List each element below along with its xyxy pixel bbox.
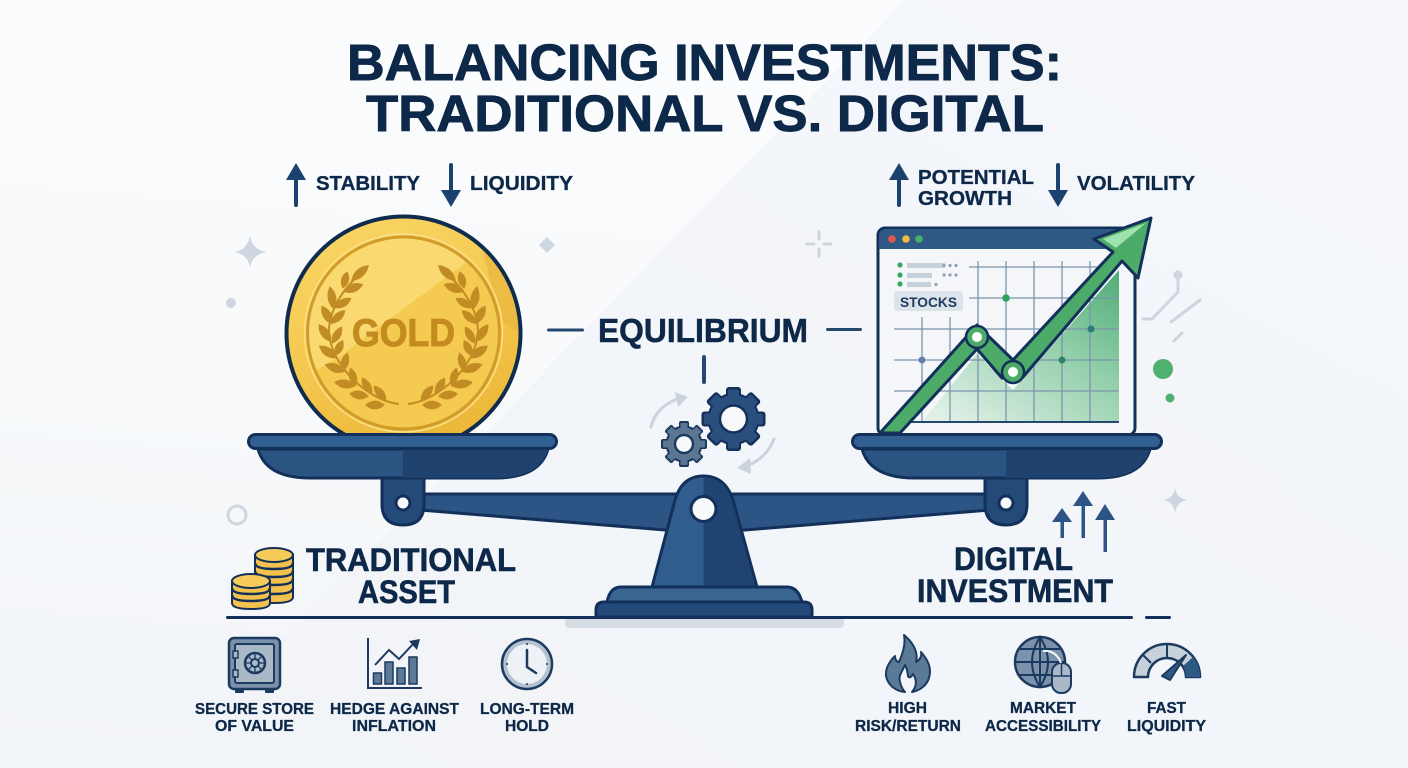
icon: small gear	[661, 421, 707, 467]
label: LONG-TERM	[480, 701, 574, 718]
label: potential growth: GROWTH	[918, 188, 1012, 210]
green dots	[1153, 359, 1174, 402]
label: RISK/RETURN	[855, 718, 961, 735]
equilibrium label: EQUILIBRIUM	[598, 312, 808, 349]
label: HIGH	[888, 700, 927, 717]
label	[985, 700, 1101, 735]
back stack	[255, 548, 293, 603]
gold coin	[286, 216, 530, 450]
icon: bar chart with arrow	[368, 638, 422, 688]
icon: globe and mouse	[1015, 637, 1071, 693]
label: HEDGE AGAINST	[330, 701, 459, 718]
label: HOLD	[505, 718, 549, 735]
rim shading	[482, 250, 518, 332]
label: ACCESSIBILITY	[985, 718, 1101, 735]
digital indicators	[889, 163, 1196, 210]
area fill	[922, 270, 1119, 422]
laurel wreath	[315, 262, 492, 409]
coin face	[309, 238, 498, 428]
label	[1127, 700, 1206, 735]
item: fast liquidity	[1127, 644, 1206, 735]
label: SECURE STORE	[195, 701, 314, 718]
label: OF VALUE	[215, 718, 294, 735]
front stack	[232, 574, 270, 609]
label	[855, 700, 961, 735]
title	[347, 34, 1062, 142]
label: potential growth	[918, 167, 1034, 210]
right pan	[852, 434, 1162, 478]
item: long-term hold	[480, 639, 574, 735]
gears	[651, 387, 774, 474]
label: FAST	[1147, 700, 1186, 717]
gold label: GOLD	[352, 312, 455, 355]
title: TRADITIONAL VS. DIGITAL	[366, 85, 1044, 142]
heading: digital investment	[917, 541, 1113, 609]
label: volatility: VOLATILITY	[1077, 173, 1196, 195]
legend list	[897, 262, 958, 287]
chart grid	[894, 261, 1119, 422]
green growth arrow	[880, 218, 1151, 433]
traditional indicators	[286, 163, 574, 207]
fulcrum	[652, 476, 757, 587]
heading: digital investment: INVESTMENT	[917, 573, 1113, 609]
icon: liquidity down arrow	[441, 163, 461, 207]
title: BALANCING INVESTMENTS:	[347, 34, 1062, 91]
label: LIQUIDITY	[1127, 718, 1206, 735]
label	[330, 701, 459, 735]
icon: volatility down arrow	[1048, 163, 1068, 207]
icon: stability up arrow	[286, 163, 306, 207]
label: liquidity: LIQUIDITY	[470, 173, 574, 195]
label: potential growth: POTENTIAL	[918, 167, 1034, 189]
left pan	[248, 434, 556, 478]
stocks tag: STOCKS	[900, 294, 957, 310]
item: hedge against inflation	[330, 638, 459, 735]
icon: rotation arrows	[651, 392, 774, 474]
stock chart window	[878, 228, 1135, 435]
label: stability: STABILITY	[316, 173, 421, 195]
stocks tag	[894, 291, 963, 311]
chart data points	[918, 294, 1094, 364]
heading: digital investment: DIGITAL	[954, 541, 1073, 577]
icon: large gear	[702, 387, 766, 451]
item: market accessibility	[985, 637, 1101, 735]
window header	[879, 229, 1134, 249]
icon: speedometer	[1134, 644, 1200, 680]
label	[480, 701, 574, 735]
heading: traditional asset: TRADITIONAL	[306, 542, 516, 578]
scale base	[596, 587, 812, 617]
decorative marks right	[807, 232, 1200, 514]
icon: flame	[886, 635, 930, 692]
ground line	[226, 616, 1171, 628]
left hanger	[382, 476, 424, 525]
label: INFLATION	[352, 718, 436, 735]
label: MARKET	[1010, 700, 1076, 717]
right hanger	[985, 476, 1027, 525]
icon: rising arrows	[1052, 491, 1115, 552]
heading: traditional asset: ASSET	[358, 574, 455, 610]
equilibrium label	[547, 312, 862, 384]
icon: safe	[229, 638, 280, 693]
scale beam	[420, 494, 990, 530]
heading: traditional asset	[306, 542, 516, 610]
item: high risk/return	[855, 635, 961, 735]
icon: clock	[502, 639, 552, 689]
icon: coin stacks	[232, 548, 293, 609]
icon: growth up arrow	[889, 163, 909, 207]
decorative sparkles left	[226, 235, 555, 524]
label	[195, 701, 314, 735]
item: secure store of value	[195, 638, 314, 735]
balance scale	[248, 434, 1162, 617]
